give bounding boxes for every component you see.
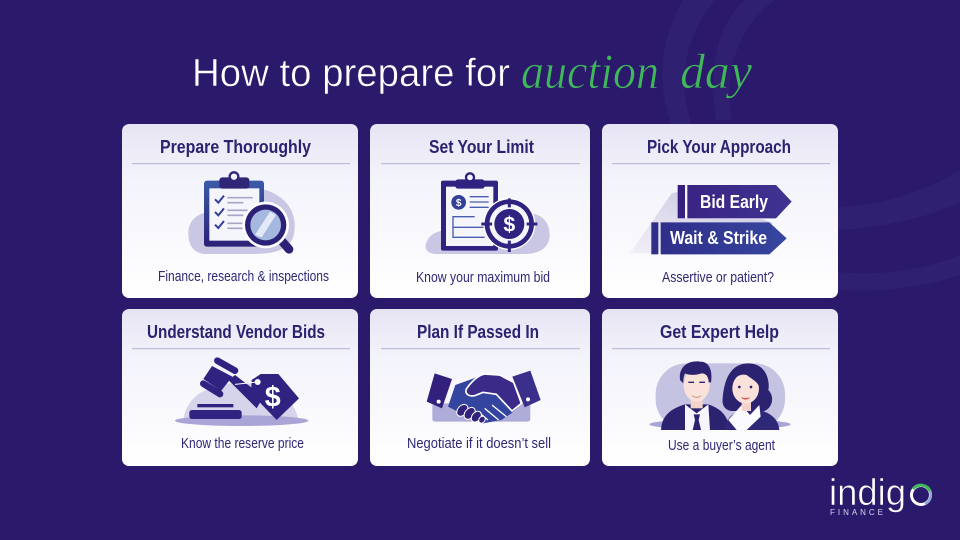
title (192, 43, 753, 99)
heading: pick your approach: Pick Your Approach (647, 136, 791, 157)
icon: clipboard and target: $ (456, 198, 462, 209)
panel: pick your approach (602, 124, 838, 298)
icon: gavel and price tag (175, 361, 308, 426)
icon: handshake (427, 371, 541, 424)
icon: clipboard and magnifier (188, 172, 295, 254)
icon: clipboard and target: $ (503, 213, 515, 237)
background swirl (662, 0, 960, 290)
panel: plan if passed in (370, 309, 590, 466)
title: auction (521, 43, 659, 99)
caption: Know your maximum bid (416, 269, 550, 286)
heading: prepare thoroughly: Prepare Thoroughly (160, 136, 312, 157)
icon: two advisers (649, 361, 791, 430)
panel: prepare thoroughly (122, 124, 358, 298)
heading: understand vendor bids: Understand Vendor Bids (147, 321, 325, 342)
panel: get expert help (602, 309, 838, 466)
caption: Negotiate if it doesn’t sell (407, 435, 551, 452)
heading: set your limit: Set Your Limit (429, 136, 534, 157)
heading: get expert help: Get Expert Help (660, 321, 779, 342)
icon: direction signs (630, 185, 792, 254)
caption: Know the reserve price (181, 435, 304, 452)
logo: indigo finance (829, 472, 931, 517)
caption: Assertive or patient? (662, 269, 774, 286)
panel: understand vendor bids (122, 309, 358, 466)
caption: Finance, research & inspections (158, 268, 329, 285)
icon: clipboard and target (426, 173, 550, 254)
title: day (680, 43, 753, 99)
sign label: wait and strike: Wait & Strike (670, 228, 767, 248)
logo: indigo finance: FINANCE (830, 508, 883, 517)
icon: gavel and price tag: $ (265, 381, 281, 413)
caption: Use a buyer’s agent (668, 437, 776, 454)
title: How to prepare for (192, 52, 510, 95)
logo: indigo finance: indig (829, 472, 906, 513)
sign label: bid early: Bid Early (700, 192, 768, 212)
panel: set your limit (370, 124, 590, 298)
heading: plan if passed in: Plan If Passed In (417, 321, 539, 342)
